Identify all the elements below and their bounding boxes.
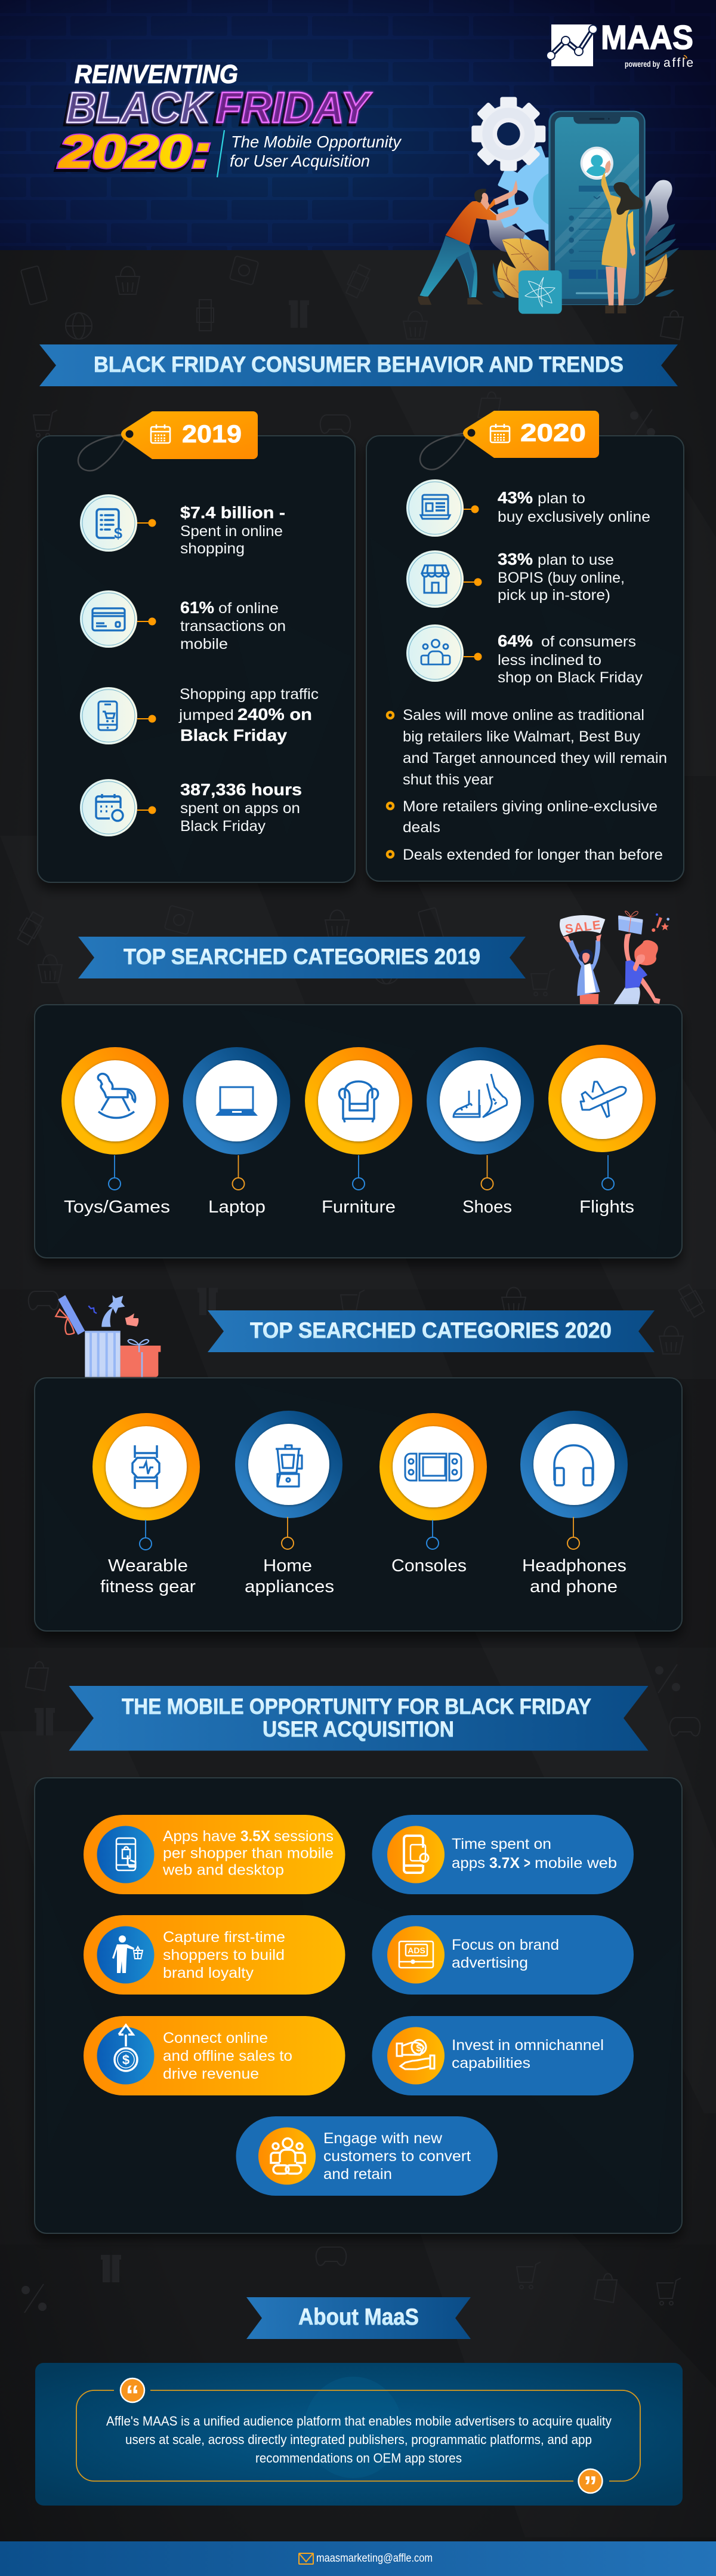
bullet list: More retailers giving online-exclusive	[403, 798, 658, 815]
stat: shopping app traffic: Black Friday	[180, 726, 287, 744]
stat: 33% BOPIS: pick up in-store)	[498, 587, 610, 604]
stat: 387,336 hours	[80, 779, 302, 836]
icon: hand with money	[397, 2040, 434, 2069]
title: 2020: 2020:	[58, 127, 211, 177]
icon: fitness watch	[132, 1445, 159, 1489]
banner: consumer behavior heading	[39, 344, 678, 386]
title: BLACK FRIDAY neon outline: BLACK	[64, 87, 213, 134]
stat: 33% BOPIS: plan to use	[538, 552, 614, 568]
confetti	[652, 913, 669, 932]
bullet list: shut this year	[403, 771, 493, 788]
icon: close quote	[579, 2469, 603, 2501]
illustration: people building app	[418, 97, 679, 314]
icon: open quote: “	[125, 2380, 140, 2411]
pill: first-time shoppers: shoppers to build	[163, 1947, 285, 1963]
panel background	[35, 1005, 682, 1258]
icon: email	[299, 2553, 313, 2564]
category: Shoes	[427, 1047, 534, 1217]
title	[55, 60, 402, 180]
title: BLACK FRIDAY neon outline: FRIDAY	[216, 84, 372, 132]
panel background	[38, 436, 355, 882]
bullet list: and Target announced they will remain	[403, 750, 667, 767]
icon: laptop	[215, 1087, 258, 1116]
icon: receipt	[80, 494, 137, 552]
stat: 61% of transactions: mobile	[180, 636, 228, 653]
icon: calendar	[490, 424, 510, 442]
banner: mobile opportunity heading: THE MOBILE OPPORTUNITY FOR BLACK FRIDAY	[122, 1694, 591, 1719]
pill: brand advertising: ADS	[408, 1946, 425, 1955]
icon: calendar with clock	[80, 779, 137, 836]
header brick wall	[0, 0, 716, 250]
stat: 33% BOPIS: 33%	[498, 550, 533, 568]
icon: store	[406, 550, 464, 608]
tag: 2019: 2019	[182, 420, 242, 448]
bullet list: deals	[403, 819, 440, 836]
orange quote border	[76, 2390, 640, 2481]
stat: 61% of transactions: of online	[218, 600, 279, 617]
pill: 3.5X sessions	[84, 1815, 345, 1894]
title: for User Acquisition	[230, 152, 370, 170]
logo: MAAS powered by affle: powered by	[625, 59, 660, 69]
tag: 2019	[121, 411, 258, 459]
illustration: sale shoppers	[560, 911, 669, 1005]
stat: 61% of transactions	[80, 590, 286, 653]
stat: 64% less inclined: less inclined to	[498, 652, 601, 669]
gear cutouts on blue gear	[514, 190, 548, 252]
pill: brand advertising: advertising	[452, 1955, 528, 1971]
stat: shopping app traffic: Shopping app traffic	[180, 686, 319, 703]
about text: Affle's MAAS is a unified audience platform that enables mobile advertisers to acquire quality	[106, 2414, 612, 2429]
bullet list: Sales will move online as traditional	[403, 707, 644, 724]
panel background	[35, 2363, 683, 2506]
category: Home appliances: Home	[263, 1556, 312, 1575]
icon: handheld console	[405, 1454, 461, 1481]
banner: top searched 2019 heading	[78, 937, 526, 978]
category: Home appliances: appliances	[245, 1577, 334, 1596]
phone	[548, 111, 646, 305]
category: Flights	[548, 1045, 656, 1217]
string loop	[78, 434, 126, 471]
icon: close quote: ”	[584, 2470, 597, 2501]
category: Wearable fitness gear	[92, 1413, 200, 1596]
stat: $7.4 billion: shopping	[180, 540, 245, 557]
category: Toys/Games	[61, 1047, 170, 1217]
stat: 64% less inclined: 64%	[498, 632, 533, 650]
pill: connect online and offline: drive revenue	[163, 2066, 259, 2082]
pill: 3.7X mobile web: 3.7X	[489, 1855, 520, 1872]
pill: first-time shoppers: Capture first-time	[163, 1929, 285, 1946]
leaves gold	[497, 238, 668, 298]
icon: open quote	[121, 2378, 144, 2411]
about text: recommendations on OEM app stores	[255, 2451, 462, 2466]
stat: shopping app traffic: 240% on	[237, 705, 312, 724]
category: Home appliances	[235, 1411, 342, 1596]
stat: $7.4 billion: Spent in online	[180, 523, 283, 540]
icon: rocking horse	[98, 1074, 135, 1118]
pill: connect online and offline	[84, 2016, 345, 2095]
plant blob right	[644, 180, 672, 256]
title: BLACK FRIDAY neon outline	[64, 84, 372, 134]
footer	[0, 2541, 716, 2576]
stat: shopping app traffic	[80, 686, 319, 744]
stat: 387,336 hours: spent on apps on	[180, 800, 300, 817]
person: woman touching screen	[601, 161, 643, 313]
panel: top searched categories 2019	[35, 1005, 682, 1258]
pill: omnichannel: Invest in omnichannel	[452, 2037, 604, 2054]
person: man pushing gear	[418, 180, 519, 305]
stat: 64% less inclined: of consumers	[541, 633, 636, 650]
category: Headphones and phone	[520, 1411, 628, 1596]
title: 2020: 2020:	[58, 127, 211, 177]
title: REINVENTING	[75, 60, 238, 89]
category: Laptop	[183, 1047, 290, 1217]
pill: 3.5X sessions: Apps have	[163, 1828, 236, 1845]
logo: MAAS powered by affle	[547, 19, 693, 70]
string loop	[420, 433, 468, 470]
stat: 33% BOPIS: BOPIS (buy online,	[498, 570, 625, 586]
pill: brand advertising	[372, 1915, 634, 1995]
footer: maasmarketing@affle.com	[316, 2552, 433, 2565]
icon: blender	[276, 1445, 302, 1486]
tag: 2020	[463, 411, 599, 458]
panel: mobile opportunity	[35, 1778, 682, 2233]
icon: shoes	[453, 1074, 507, 1117]
stat: 64% less inclined	[406, 624, 643, 686]
logo: MAAS powered by affle: MAAS	[601, 19, 693, 57]
bullet list	[387, 707, 667, 863]
category: Toys/Games: Toys/Games	[64, 1198, 170, 1217]
stat: 43% buy online: buy exclusively online	[498, 509, 650, 525]
panel: top searched categories 2020	[35, 1378, 682, 1631]
title: 2020: 2020:	[55, 130, 211, 180]
title: BLACK FRIDAY neon outline: BLACK	[66, 84, 213, 132]
pill: 3.5X sessions: 3.5X	[240, 1828, 270, 1845]
category: Wearable fitness gear: Wearable	[108, 1556, 188, 1575]
pill: first-time shoppers	[84, 1915, 345, 1995]
pill: connect online and offline: Connect online	[163, 2030, 268, 2046]
icon: online store laptop	[406, 479, 464, 537]
pill: brand advertising: Focus on brand	[452, 1937, 559, 1953]
bullet list: big retailers like Walmart, Best Buy	[403, 728, 641, 745]
banner: mobile opportunity heading	[69, 1686, 648, 1750]
banner: consumer behavior heading: BLACK FRIDAY CONSUMER BEHAVIOR AND TRENDS	[94, 352, 624, 377]
pill: connect online and offline: and offline sales to	[163, 2048, 292, 2064]
stat: shopping app traffic: jumped	[178, 707, 234, 724]
stat: 43% buy online: 43%	[498, 488, 533, 507]
banner: top searched 2020 heading	[208, 1310, 655, 1352]
pill: omnichannel	[372, 2016, 634, 2095]
icon: white gear	[471, 97, 545, 171]
pill: 3.5X sessions: sessions	[274, 1828, 334, 1845]
plant blob left	[486, 207, 525, 257]
panel: 2019	[38, 411, 355, 882]
icon: headphones	[554, 1445, 593, 1485]
pill: 3.7X mobile web: apps	[452, 1855, 485, 1872]
person with sale sign: SALE	[564, 918, 601, 936]
banner: top searched 2019 heading: TOP SEARCHED CATEGORIES 2019	[124, 944, 480, 969]
icon: receipt: $	[114, 524, 123, 542]
pill: 3.5X sessions: per shopper than mobile	[163, 1845, 334, 1861]
plant leaves dark	[492, 199, 679, 298]
icon: shopper with basket	[112, 1935, 134, 1973]
pill: 3.7X mobile web: Time spent on	[452, 1836, 551, 1852]
stat: 43% buy online	[406, 479, 650, 537]
icon: armchair	[339, 1082, 378, 1122]
pill: 3.7X mobile web	[372, 1815, 634, 1894]
stat: 33% BOPIS	[406, 550, 625, 608]
icon: phone with calendar	[404, 1836, 428, 1873]
icon: revenue coin with arrow	[115, 2025, 137, 2071]
category: Flights: Flights	[579, 1198, 634, 1217]
icon: blue gear	[497, 146, 592, 252]
pill: engage new customers: and retain	[323, 2166, 392, 2183]
panel: 2020	[366, 411, 684, 881]
title: BLACK FRIDAY neon outline: FRIDAY	[214, 87, 371, 134]
tag: 2020: 2020	[520, 418, 586, 447]
app profile avatar	[581, 147, 613, 180]
panel background	[35, 1778, 682, 2233]
stat: 43% buy online: plan to	[538, 490, 585, 507]
pill: engage new customers: Engage with new	[323, 2130, 443, 2147]
stat: 61% of transactions: 61%	[180, 598, 214, 617]
icon: consumers group	[406, 624, 464, 682]
category: Consoles	[379, 1413, 487, 1575]
person with sale sign	[560, 915, 605, 1005]
category: Wearable fitness gear: fitness gear	[100, 1577, 196, 1596]
pill: connect online and offline: $	[122, 2052, 129, 2067]
category: Furniture	[305, 1047, 412, 1217]
category: Laptop: Laptop	[208, 1198, 266, 1217]
pill: omnichannel: $	[416, 2042, 422, 2054]
pill: 3.7X mobile web: mobile web	[535, 1855, 617, 1872]
stat: 64% less inclined: shop on Black Friday	[498, 669, 643, 686]
icon: calendar	[151, 424, 170, 443]
panel background	[35, 1378, 682, 1631]
cube logo	[519, 270, 562, 314]
faint background icons	[16, 256, 706, 2313]
logo: MAAS powered by affle: affle	[663, 56, 693, 70]
icon: phone with cart	[80, 687, 137, 744]
pill: engage new customers: customers to convert	[323, 2148, 471, 2165]
pill: engage new customers	[236, 2116, 498, 2196]
banner: mobile opportunity heading: USER ACQUISITION	[263, 1717, 454, 1741]
stat: 387,336 hours: Black Friday	[180, 818, 266, 835]
banner: About MaaS heading	[246, 2297, 471, 2339]
panel: About MaaS	[35, 2363, 683, 2506]
icon: credit card	[80, 590, 137, 648]
banner: About MaaS heading: About MaaS	[298, 2304, 419, 2330]
banner: top searched 2020 heading: TOP SEARCHED CATEGORIES 2020	[250, 1318, 612, 1343]
category: Shoes: Shoes	[462, 1198, 512, 1217]
icon: phone with bag	[116, 1838, 135, 1870]
category: Headphones and phone: and phone	[530, 1577, 618, 1596]
icon: airplane	[581, 1082, 626, 1117]
stat: $7.4 billion	[80, 494, 285, 557]
stat: 61% of transactions: transactions on	[180, 618, 286, 635]
pill: omnichannel: capabilities	[452, 2055, 530, 2072]
stat: $7.4 billion: $7.4 billion -	[180, 503, 285, 522]
stat: 387,336 hours: 387,336 hours	[180, 780, 302, 799]
category: Consoles: Consoles	[391, 1556, 467, 1575]
pill: 3.7X mobile web: >	[524, 1855, 530, 1872]
category: Headphones and phone: Headphones	[522, 1556, 626, 1575]
about text: users at scale, across directly integrated publishers, programmatic platforms, and app	[125, 2432, 592, 2447]
icon: ads screen	[399, 1941, 433, 1968]
icon: people with chain link	[271, 2138, 305, 2174]
panel background	[366, 436, 684, 881]
person with gift	[613, 911, 661, 1004]
pill: first-time shoppers: brand loyalty	[163, 1965, 254, 1981]
about text	[106, 2414, 612, 2466]
illustration: open gift boxes	[55, 1295, 161, 1377]
icon: logo chart mark	[547, 24, 597, 66]
bullet list: Deals extended for longer than before	[403, 847, 663, 863]
category: Furniture: Furniture	[322, 1198, 396, 1217]
title: The Mobile Opportunity	[231, 133, 402, 151]
pill: 3.5X sessions: web and desktop	[162, 1861, 284, 1878]
